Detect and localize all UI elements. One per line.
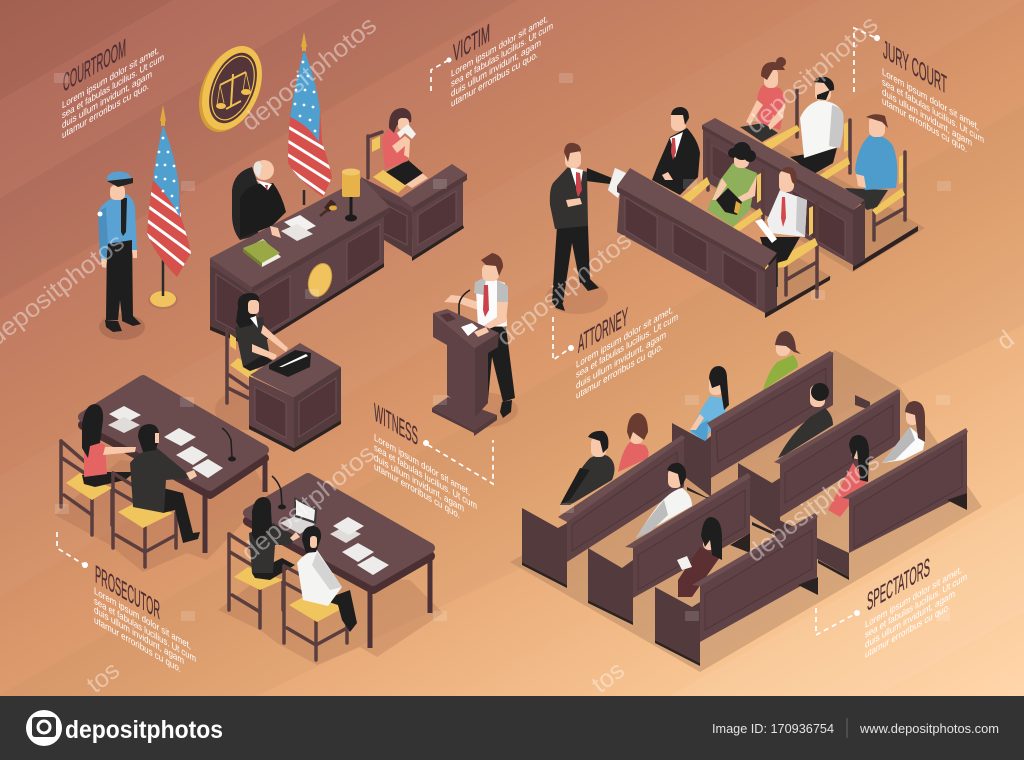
table right with defence [218, 476, 443, 665]
microphone [222, 428, 236, 462]
table top [83, 380, 264, 494]
man defender [297, 526, 357, 632]
heading and text: jury court: sea et fabulas lucilius. Ut cum [882, 77, 984, 146]
witness hand on podium [474, 327, 489, 337]
chairs front row [682, 140, 763, 232]
logo icon: camera [26, 710, 62, 746]
footer bar [0, 696, 1024, 760]
watermarks: tos [81, 656, 125, 699]
heading and text: attorney: utamur erroribus cu quo. [576, 342, 663, 402]
spectator white shirt man [636, 463, 692, 538]
flag right behind judge [288, 32, 332, 205]
spectator with tablet [677, 517, 722, 597]
juror suited man [652, 107, 700, 195]
heading and text: spectators [865, 531, 967, 661]
spectator red woman [618, 413, 649, 472]
bench C [588, 473, 751, 625]
heading and text: witness: Lorem ipsum dolor sit amet, [374, 433, 470, 498]
heading and text: spectators: utamur erroribus cu quo. [865, 602, 950, 661]
attorney papers [608, 168, 626, 198]
woman defender [249, 497, 300, 580]
gavel [320, 199, 337, 216]
heading and text: jury court: utamur erroribus cu quo. [882, 96, 967, 155]
chair two [113, 473, 176, 567]
figure: attorney [546, 143, 626, 314]
witness figure [444, 253, 515, 418]
chair of victim [368, 132, 382, 178]
connector: witness [423, 440, 493, 484]
microphone [454, 290, 470, 328]
judge hand [270, 226, 281, 238]
heading and text: witness: duis ullum invidunt, agam [374, 453, 464, 515]
juror white shirt man [755, 167, 818, 297]
book [243, 239, 281, 267]
watermarks: depositphotos [741, 10, 883, 140]
witness stand with witness [432, 253, 518, 436]
bench D [738, 389, 900, 538]
papers [281, 215, 316, 241]
bench B [672, 351, 834, 500]
heading and text: jury court: Lorem ipsum dolor sit amet, [882, 67, 979, 133]
watermarks: depositphotos [491, 226, 637, 352]
heading and text: victim: Lorem ipsum dolor sit amet, [451, 14, 548, 80]
chair four [284, 566, 347, 660]
heading and text: prosecutor: sea et fabulas lucilius. Ut cum [94, 596, 196, 665]
heading and text: victim: sea et fabulas lucilius. Ut cum [451, 21, 553, 90]
heading and text: courtroom: sea et fabulas lucilius. Ut cum [62, 52, 164, 121]
heading and text: prosecutor [94, 559, 196, 684]
heading and text: victim [451, 0, 553, 110]
chair one [61, 441, 112, 535]
heading and text: jury court: duis ullum invidunt, agam [882, 87, 972, 149]
figure: police officer [98, 172, 145, 340]
laptop [280, 497, 317, 534]
victim figure [373, 108, 428, 193]
table legs [370, 560, 430, 648]
pew B with spectators [672, 331, 834, 500]
connector: victim [431, 58, 452, 91]
watermark camera icons [54, 73, 951, 621]
bench E [655, 513, 818, 666]
back row wall [702, 118, 865, 267]
spectator red top woman [828, 435, 869, 517]
heading and text: witness [374, 398, 477, 531]
bench A [522, 435, 685, 588]
heading and text: attorney: ATTORNEY [578, 302, 628, 359]
spectator black jacket man [560, 431, 614, 505]
juror red woman [740, 57, 786, 142]
chairs back row [763, 90, 905, 240]
victim box with victim [361, 108, 467, 261]
watermarks: depositphotos [236, 11, 382, 137]
table top [248, 478, 430, 589]
watermarks: depositphotos [741, 447, 885, 568]
heading and text: attorney: Lorem ipsum dolor sit amet, [576, 305, 673, 371]
logo text: depositphotos [65, 716, 223, 744]
heading and text: spectators: duis ullum invidunt, agam [865, 589, 955, 651]
juror bearded man [790, 77, 844, 175]
heading and text: attorney: sea et fabulas lucilius. Ut cum [576, 312, 678, 381]
microphone [272, 476, 286, 510]
front platform [740, 246, 832, 318]
front row wall [617, 168, 777, 313]
heading and text: attorney [576, 273, 678, 402]
heading and text: jury court [882, 34, 984, 165]
heading and text: courtroom [62, 11, 164, 141]
heading and text: courtroom: utamur erroribus cu quo. [62, 81, 149, 141]
watermarks: d [991, 325, 1020, 356]
heading and text: courtroom: duis ullum invidunt, agam [62, 69, 152, 131]
pew C with spectator [588, 463, 751, 625]
figure: judge in chair [232, 160, 286, 240]
icon: scales of justice seal [187, 37, 274, 141]
heading and text: spectators: sea et fabulas lucilius. Ut cum [865, 572, 967, 641]
heading and text: attorney: duis ullum invidunt, agam [576, 330, 666, 392]
clerk chair [227, 328, 262, 403]
man prosecutor [130, 424, 200, 543]
heading and text: victim: duis ullum invidunt, agam [451, 38, 541, 100]
pew D with spectator [738, 383, 900, 538]
papers [330, 517, 389, 575]
connector: prosecutor [57, 532, 88, 568]
heading and text: prosecutor: PROSECUTOR [95, 560, 160, 625]
podium [432, 309, 499, 436]
pew E with spectator [655, 513, 818, 666]
spectators benches [510, 331, 982, 672]
table left one with prosecutors [55, 380, 270, 572]
judge desk [210, 168, 390, 348]
spectator black man [778, 383, 833, 458]
heading and text: prosecutor: utamur erroribus cu quo. [94, 615, 181, 675]
shadow and back platform [700, 145, 925, 272]
chair three [229, 534, 283, 628]
typewriter [269, 350, 311, 377]
spectator blue woman [690, 366, 729, 443]
clerk figure [235, 293, 288, 371]
spectator green woman [763, 331, 801, 390]
spectator grey woman [882, 401, 925, 463]
woman prosecutor [82, 404, 136, 487]
heading and text: witness: utamur erroribus cu quo. [374, 462, 460, 521]
table legs [205, 462, 265, 553]
image id: Image ID: 170936754 [712, 722, 834, 736]
bench F [775, 428, 968, 580]
pew F with spectators [775, 401, 968, 580]
connector: attorney [553, 317, 574, 360]
heading and text: victim: utamur erroribus cu quo. [451, 50, 538, 110]
heading and text: spectators: Lorem ipsum dolor sit amet, [865, 565, 962, 631]
juror blue man [845, 114, 897, 210]
lamp [342, 168, 360, 222]
heading and text: courtroom: Lorem ipsum dolor sit amet, [62, 45, 159, 111]
clerk at typewriter [215, 293, 341, 452]
heading and text: witness: WITNESS [374, 398, 418, 451]
heading and text: prosecutor: duis ullum invidunt, agam [94, 605, 184, 667]
floor shadow [510, 350, 982, 672]
papers [108, 406, 223, 478]
connector: jury court [854, 28, 880, 92]
watermarks: tos [586, 656, 630, 699]
heading and text: prosecutor: Lorem ipsum dolor sit amet, [94, 586, 191, 652]
wooden box [361, 164, 467, 261]
flag left with stand [147, 106, 191, 309]
jury box [617, 57, 925, 318]
heading and text: witness: sea et fabulas lucilius. Ut cum [374, 443, 477, 512]
connector: spectators [816, 608, 860, 635]
pew A with spectators [522, 413, 685, 588]
juror leg below box [776, 258, 778, 287]
watermarks: depositphotos [236, 439, 380, 567]
juror green woman [707, 142, 757, 227]
clerk desk [249, 343, 341, 452]
website: www.depositphotos.com [859, 722, 999, 736]
